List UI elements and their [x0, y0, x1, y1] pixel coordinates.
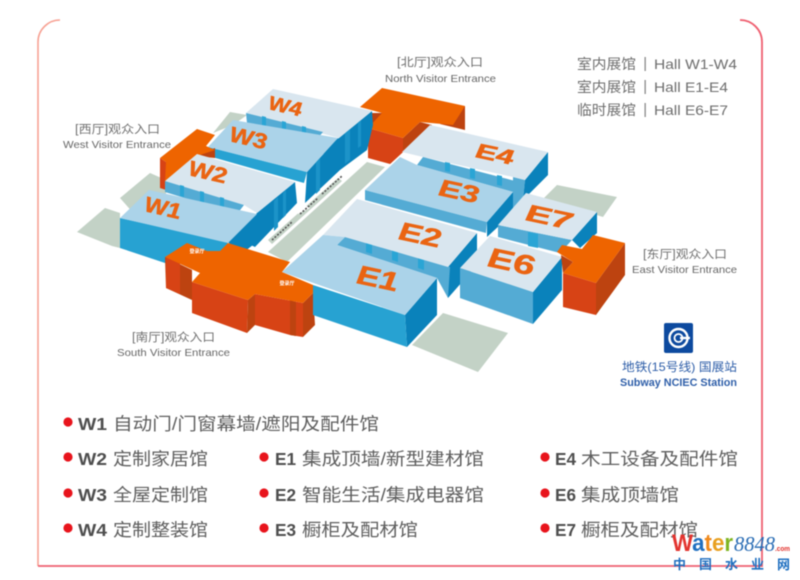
hall W4: [246, 89, 373, 170]
hall E3: [365, 157, 513, 237]
label: west entrance: [西厅]观众入口: [75, 123, 160, 136]
legend: E2: 智能生活/集成电器馆: [302, 485, 484, 505]
legend: W4: W4: [78, 520, 107, 540]
watermark logo: 中国水业网: [673, 557, 790, 572]
legend: W2: 定制家居馆: [113, 449, 208, 469]
label: subway station: 地铁(15号线) 国展站: [622, 360, 737, 374]
legend: E6: E6: [555, 485, 576, 505]
legend: E3: E3: [275, 520, 296, 540]
hall E1: [282, 235, 437, 347]
legend: E3: 橱柜及配材馆: [302, 520, 418, 540]
watermark logo: 8848: [734, 532, 775, 556]
legend: E7: [540, 520, 698, 540]
hall W2: [165, 154, 297, 247]
label: east entrance: East Visitor Entrance: [632, 264, 737, 276]
label: south entrance: [117, 330, 230, 359]
label: subway station: [620, 360, 737, 389]
hall E2: [323, 199, 477, 298]
legend: E2: E2: [275, 485, 296, 505]
hall type key: [577, 56, 737, 118]
legend: E7: E7: [555, 520, 576, 540]
west entrance building: [160, 129, 215, 190]
legend: [63, 414, 738, 540]
east entrance building: [557, 235, 625, 315]
label: subway station: Subway NCIEC Station: [620, 377, 737, 389]
hall W2: W2: [187, 156, 229, 189]
hall type key: Hall E1-E4: [654, 79, 728, 95]
hall W1: W1: [143, 192, 182, 224]
hall E4: E4: [474, 139, 515, 170]
legend: W2: [63, 449, 208, 469]
label: north entrance: [北厅]观众入口: [397, 56, 483, 69]
label: east entrance: [632, 248, 737, 276]
legend: E1: 集成顶墙/新型建材馆: [302, 449, 484, 469]
north entrance building: [360, 88, 465, 164]
icon: subway logo: [664, 323, 693, 353]
south entrance building: [165, 243, 315, 337]
hall E7: [498, 193, 597, 253]
hall W3: [208, 120, 340, 203]
label: south entrance: South Visitor Entrance: [117, 347, 230, 359]
hall type key: 室内展馆: [577, 56, 636, 72]
legend: E6: 集成顶墙馆: [581, 485, 679, 505]
hall E1: E1: [355, 259, 400, 298]
hall E6: E6: [486, 242, 536, 282]
label: south entrance: [南厅]观众入口: [132, 330, 215, 344]
label: west entrance: [63, 123, 171, 151]
hall type key: Hall W1-W4: [654, 56, 737, 72]
hall W1: [120, 190, 262, 263]
legend: E1: E1: [275, 449, 296, 469]
central avenue: [255, 158, 385, 262]
watermark logo: [672, 530, 790, 572]
hall E6: [460, 236, 562, 324]
floor plan: [77, 88, 625, 372]
legend: E4: E4: [555, 449, 576, 469]
legend: E4: 木工设备及配件馆: [581, 449, 738, 469]
hall type key: 室内展馆: [577, 79, 636, 95]
legend: E6: [540, 485, 679, 505]
watermark logo: Water: [672, 530, 733, 557]
hall E4: [402, 125, 548, 213]
legend: W1: 自动门/门窗幕墙/遮阳及配件馆: [113, 414, 379, 434]
legend: W3: [63, 485, 208, 505]
label: east entrance: [东厅]观众入口: [643, 248, 727, 261]
hall E3: E3: [437, 175, 481, 210]
legend: W2: W2: [78, 449, 107, 469]
south hall labels: 登录厅: [189, 248, 205, 255]
south hall labels: 登录厅: [279, 280, 295, 287]
hall E2: E2: [397, 216, 443, 254]
hall type key: Hall E6-E7: [654, 102, 728, 118]
watermark logo: .com: [775, 544, 790, 553]
hall W4: W4: [267, 92, 303, 121]
hall type key: 临时展馆: [577, 102, 636, 118]
label: west entrance: West Visitor Entrance: [63, 139, 171, 151]
legend: W3: W3: [78, 485, 107, 505]
south hall labels: [189, 248, 295, 287]
ground slabs: [77, 112, 617, 372]
hall E7: E7: [524, 200, 576, 236]
legend: W3: 全屋定制馆: [113, 485, 208, 505]
legend: W1: W1: [78, 414, 107, 434]
label: north entrance: [385, 56, 496, 85]
hall W3: W3: [228, 122, 269, 155]
label: north entrance: North Visitor Entrance: [385, 73, 496, 85]
legend: E7: 橱柜及配材馆: [581, 520, 698, 540]
legend: E3: [259, 520, 418, 540]
legend: W4: 定制整装馆: [113, 520, 208, 540]
legend: W4: [63, 520, 208, 540]
